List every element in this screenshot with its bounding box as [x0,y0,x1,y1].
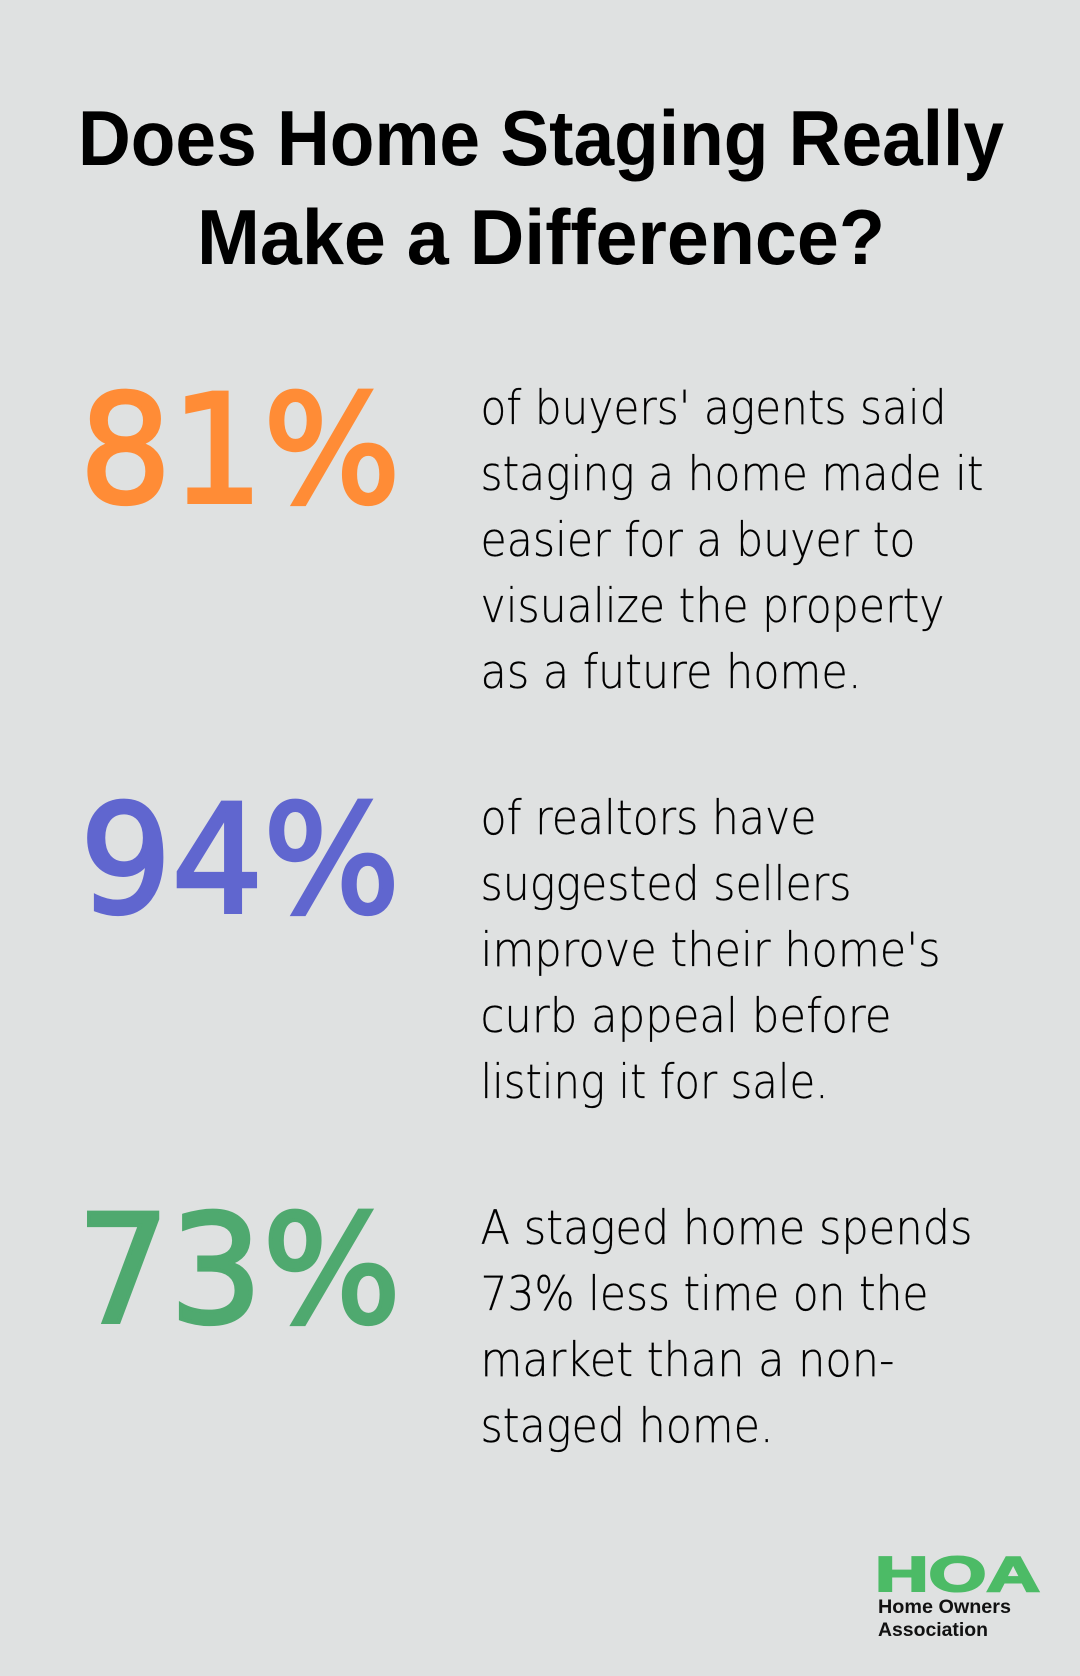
title: Make a Difference? [197,193,885,281]
text: staged home: staged home. [480,1399,774,1454]
logo: HOA: Association [878,1620,988,1641]
text: staged home: 73% less time on the [480,1267,928,1322]
text: staged home: market than a non- [480,1333,894,1388]
text: buyers' agents: easier for a buyer to [480,513,916,568]
title [78,94,1004,281]
text: buyers' agents: of buyers' agents said [480,381,946,436]
panel: stat 94% [80,774,940,1110]
text: realtors: of realtors have [480,791,816,846]
text: buyers' agents: staging a home made it [480,447,984,502]
number: 73%: 73% [77,1184,401,1358]
text: realtors [480,791,940,1110]
logo: HOA: HOA [875,1548,1040,1602]
text: realtors: suggested sellers [480,857,852,912]
number: 94%: 94% [80,774,400,948]
logo: HOA: Home Owners [878,1597,1011,1618]
text: staged home [480,1201,972,1454]
text: buyers' agents [480,381,984,700]
logo: HOA [875,1548,1040,1641]
title: Does Home Staging Really [78,94,1004,182]
text: staged home: A staged home spends [480,1201,972,1256]
number: 81%: 81% [80,364,400,538]
panel: stat 81% [80,364,984,700]
text: realtors: improve their home's [480,923,940,978]
text: realtors: curb appeal before [480,989,892,1044]
text: realtors: listing it for sale. [480,1055,828,1110]
text: buyers' agents: as a future home. [480,645,862,700]
panel: stat 73% [77,1184,972,1454]
text: buyers' agents: visualize the property [480,579,944,634]
